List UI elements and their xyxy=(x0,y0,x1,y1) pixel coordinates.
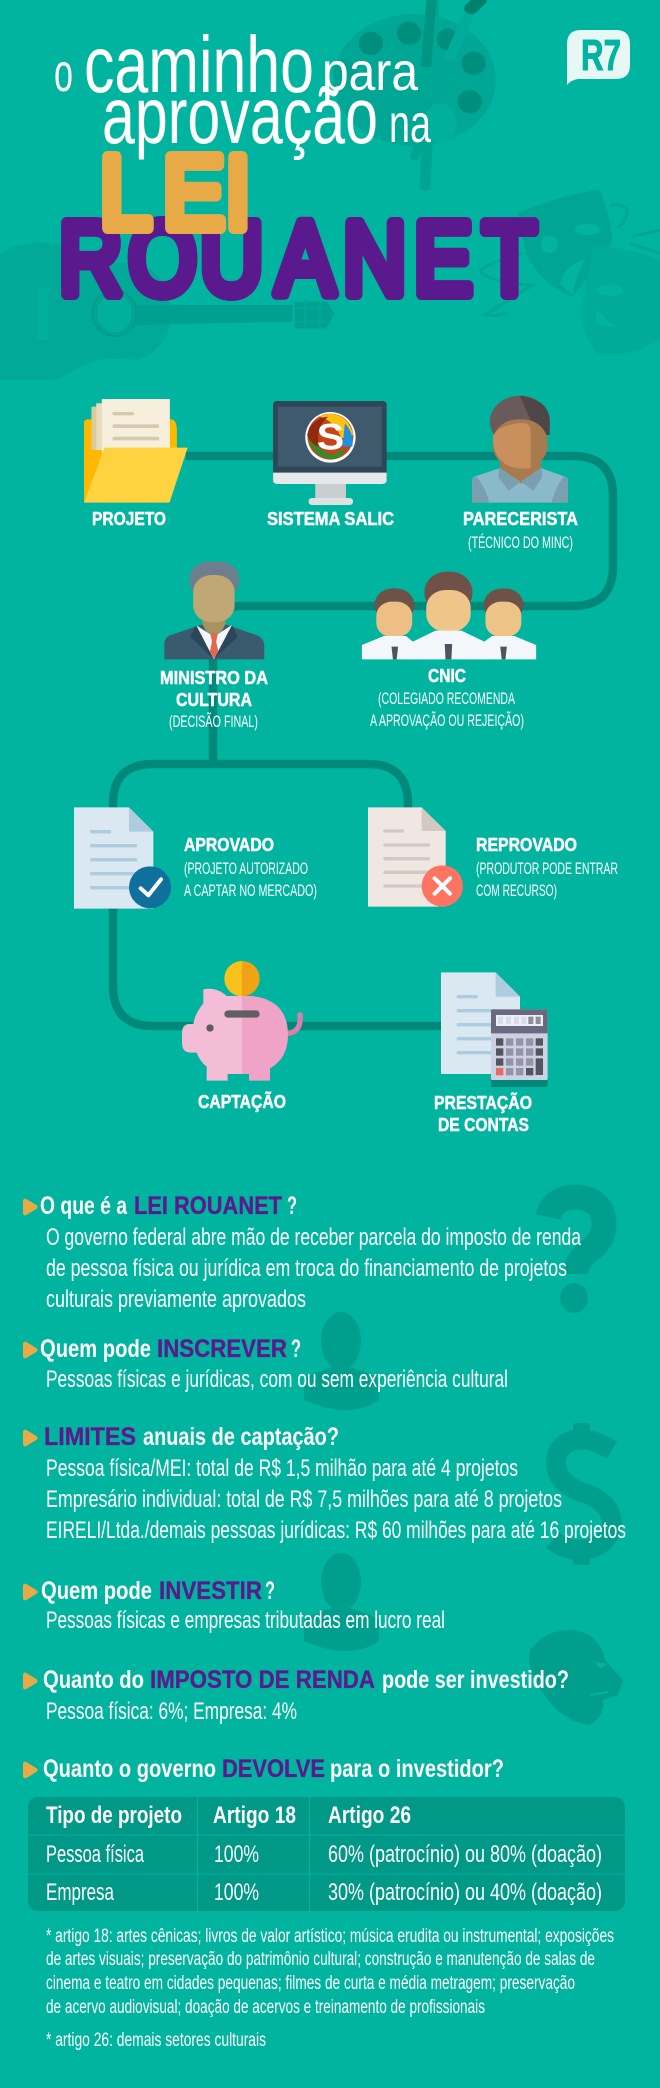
section: limites de captacao xyxy=(24,1423,626,1544)
footnote: artigo 26: * artigo 26: demais setores culturais xyxy=(46,2030,266,2051)
bullet arrow xyxy=(24,1343,36,1357)
label: prestacao de contas: DE CONTAS xyxy=(438,1115,529,1135)
table row: empresa: 100% xyxy=(214,1879,259,1906)
body text: culturais previamente aprovados xyxy=(46,1286,306,1313)
bullet arrow xyxy=(24,1585,36,1599)
table header: Tipo de projeto xyxy=(46,1802,182,1829)
icon: person silhouette two xyxy=(304,1553,379,1651)
footnote: artigo 18 xyxy=(46,1926,614,2018)
icon: lion head xyxy=(529,1630,623,1725)
icon: rejected document xyxy=(368,807,463,907)
icon: CNIC group of three people xyxy=(362,572,536,659)
table row: pessoa fisica: 100% xyxy=(214,1841,259,1868)
bullet arrow xyxy=(24,1200,36,1214)
flow labels xyxy=(92,509,618,1135)
heading: ? xyxy=(265,1577,275,1605)
title word: LEI: LEI xyxy=(100,134,251,250)
heading: Quem pode xyxy=(40,1335,151,1363)
label: parecerista: (TÉCNICO DO MINC) xyxy=(468,533,573,552)
table row: empresa xyxy=(46,1879,602,1906)
icon: right committee member xyxy=(482,588,536,659)
table row: pessoa fisica: Pessoa física xyxy=(46,1841,144,1868)
icon: guitar xyxy=(0,243,335,380)
icon: project folder xyxy=(84,399,188,503)
heading: LIMITES xyxy=(44,1423,136,1451)
label: ministro da cultura: CULTURA xyxy=(176,690,252,710)
label: reprovado: REPROVADO xyxy=(476,835,577,855)
heading: Quem pode xyxy=(41,1577,152,1605)
bullet arrow xyxy=(24,1674,36,1688)
heading: ? xyxy=(287,1192,297,1220)
heading: para o investidor? xyxy=(330,1755,504,1783)
icon: dollar sign xyxy=(552,1423,612,1565)
background icons: text section xyxy=(304,1197,623,1725)
heading xyxy=(43,1666,569,1694)
icon: paint palette xyxy=(333,0,496,187)
title line: o caminho para: o xyxy=(54,43,73,103)
icon: accounting document and calculator xyxy=(441,972,548,1087)
icon: approved document xyxy=(74,807,171,909)
label: cnic: CNIC xyxy=(428,666,466,686)
body text xyxy=(46,1224,581,1313)
heading xyxy=(41,1577,275,1605)
label: captacao: CAPTAÇÃO xyxy=(198,1091,286,1112)
label: cnic: A APROVAÇÃO OU REJEIÇÃO) xyxy=(370,711,524,730)
footnote: artigo 18: de acervo audiovisual; doação de acervos e treinamento de profissionais xyxy=(46,1997,485,2018)
logo: R7: R7 xyxy=(581,31,621,80)
heading xyxy=(44,1423,339,1451)
title xyxy=(54,20,536,317)
section: quem pode investir xyxy=(24,1577,445,1634)
label: reprovado xyxy=(476,835,618,900)
heading: Quanto o governo xyxy=(43,1755,216,1783)
heading: DEVOLVE xyxy=(222,1755,325,1783)
heading: O que é a xyxy=(40,1192,128,1220)
icon: left committee member xyxy=(362,588,415,659)
heading: pode ser investido? xyxy=(382,1666,569,1694)
body text xyxy=(46,1455,626,1544)
flow part two: outcome steps xyxy=(74,807,548,1087)
heading: INVESTIR xyxy=(159,1577,262,1605)
label: aprovado xyxy=(184,835,317,900)
body text: Pessoa física: 6%; Empresa: 4% xyxy=(46,1698,297,1725)
flow part one: submission steps xyxy=(84,396,568,659)
icon: computer monitor with Salic logo xyxy=(273,401,387,505)
flow connector lines xyxy=(113,456,613,1026)
body text: Pessoas físicas e empresas tributadas em lucro real xyxy=(46,1607,445,1634)
table row: pessoa fisica xyxy=(46,1841,602,1868)
label: aprovado: A CAPTAR NO MERCADO) xyxy=(184,881,317,900)
section: quem pode inscrever xyxy=(24,1335,508,1393)
label: sistema salic: SISTEMA SALIC xyxy=(267,509,394,529)
heading: LEI ROUANET xyxy=(134,1192,282,1220)
bullet arrow xyxy=(24,1763,36,1777)
icon: piggy bank with coin xyxy=(182,961,300,1081)
table xyxy=(28,1797,625,1911)
icon: computer monitor with Salic logo: S xyxy=(317,416,344,458)
label: aprovado: (PROJETO AUTORIZADO xyxy=(184,859,308,878)
background icons: header xyxy=(0,0,660,380)
icon: person silhouette one xyxy=(304,1312,379,1410)
title line: aprovacao na: aprovação xyxy=(102,71,378,160)
logo: R7 xyxy=(567,30,630,85)
heading: IMPOSTO DE RENDA xyxy=(150,1666,375,1694)
table header xyxy=(46,1802,411,1829)
label: aprovado: APROVADO xyxy=(184,835,274,855)
title word: ROUANET: ROUANET xyxy=(59,201,536,317)
title line: o caminho para: caminho xyxy=(84,20,314,109)
icon: parecerista person xyxy=(472,396,568,503)
table header: Artigo 26 xyxy=(328,1802,411,1829)
heading xyxy=(43,1755,504,1783)
label: parecerista: PARECERISTA xyxy=(463,509,578,529)
bullet arrow xyxy=(24,1431,36,1445)
table header: Artigo 18 xyxy=(213,1802,296,1829)
label: prestacao de contas xyxy=(434,1092,532,1135)
heading: Quanto do xyxy=(43,1666,144,1694)
section: o que e a lei rouanet xyxy=(24,1192,581,1313)
label: cnic xyxy=(370,666,524,730)
label: projeto: PROJETO xyxy=(92,509,166,529)
title line: aprovacao na: na xyxy=(389,94,432,154)
section: quanto do imposto de renda xyxy=(24,1666,569,1725)
label: ministro da cultura: MINISTRO DA xyxy=(160,668,268,688)
title line: o caminho para: para xyxy=(322,42,419,102)
table row: empresa: Empresa xyxy=(46,1879,114,1906)
heading: ? xyxy=(291,1335,301,1363)
label: ministro da cultura: (DECISÃO FINAL) xyxy=(169,712,258,731)
label: parecerista xyxy=(463,509,578,552)
heading xyxy=(40,1335,301,1363)
section: quanto o governo devolve xyxy=(24,1755,625,2051)
label: ministro da cultura xyxy=(160,668,268,731)
icon: central committee member xyxy=(409,572,488,659)
icon: theatre masks xyxy=(481,189,660,355)
heading: INSCREVER xyxy=(157,1335,287,1363)
heading: anuais de captação? xyxy=(143,1423,339,1451)
label: reprovado: COM RECURSO) xyxy=(476,881,557,900)
label: prestacao de contas: PRESTAÇÃO xyxy=(434,1092,532,1113)
icon: question mark xyxy=(548,1197,604,1313)
icon: minister in suit xyxy=(164,562,264,659)
heading xyxy=(40,1192,297,1220)
label: cnic: (COLEGIADO RECOMENDA xyxy=(378,689,515,708)
